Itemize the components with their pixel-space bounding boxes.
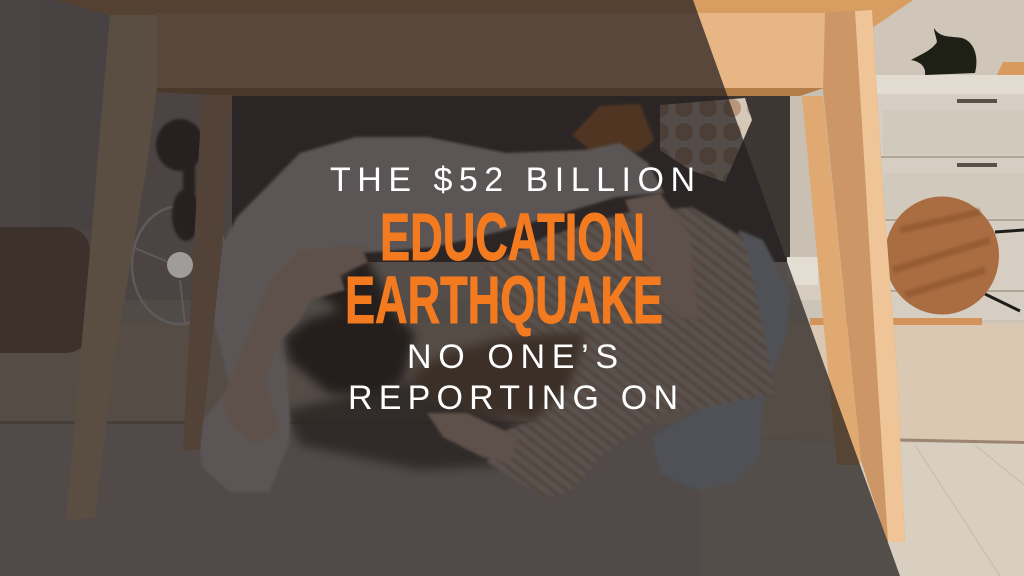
- headline: [330, 161, 695, 417]
- photo: round wooden board: [810, 196, 1024, 325]
- photo: man's hand and arm on head: [222, 245, 368, 445]
- headline line: earthquake: EARTHQUAKE: [345, 263, 663, 338]
- photo: woman's hand: [427, 413, 518, 463]
- photo: man's hand on woman's back: [625, 193, 698, 318]
- photo: pouf and fan at left: [0, 206, 228, 353]
- headline line: no one's: NO ONE’S: [407, 338, 618, 376]
- photo: person in jeans legs: [652, 230, 790, 490]
- photo: fan hub highlight: [167, 252, 193, 278]
- headline line: the $52 billion: THE $52 BILLION: [330, 161, 695, 199]
- photo: wooden table top and apron: [55, 0, 913, 96]
- photo: woman's hair: [411, 333, 585, 420]
- photo: man's white shirt: [198, 137, 664, 492]
- photo: woman's striped shirt: [486, 207, 775, 497]
- photo: potted plant: [911, 28, 976, 75]
- headline line: education: EDUCATION: [380, 200, 645, 275]
- photo: white cabinet: [875, 75, 1024, 320]
- photo: dark sofa: [232, 96, 818, 285]
- photo: houseplant silhouette behind table: [156, 119, 204, 241]
- photo: floor and rug: [0, 300, 1024, 576]
- photo: cushions on sofa: [572, 98, 752, 182]
- headline line: reporting on: REPORTING ON: [348, 379, 678, 417]
- photo: man's dark hair: [285, 253, 415, 397]
- photo: table legs: [66, 10, 905, 542]
- photo: orange book on cabinet: [997, 62, 1024, 75]
- photo: shadow under people: [285, 380, 530, 470]
